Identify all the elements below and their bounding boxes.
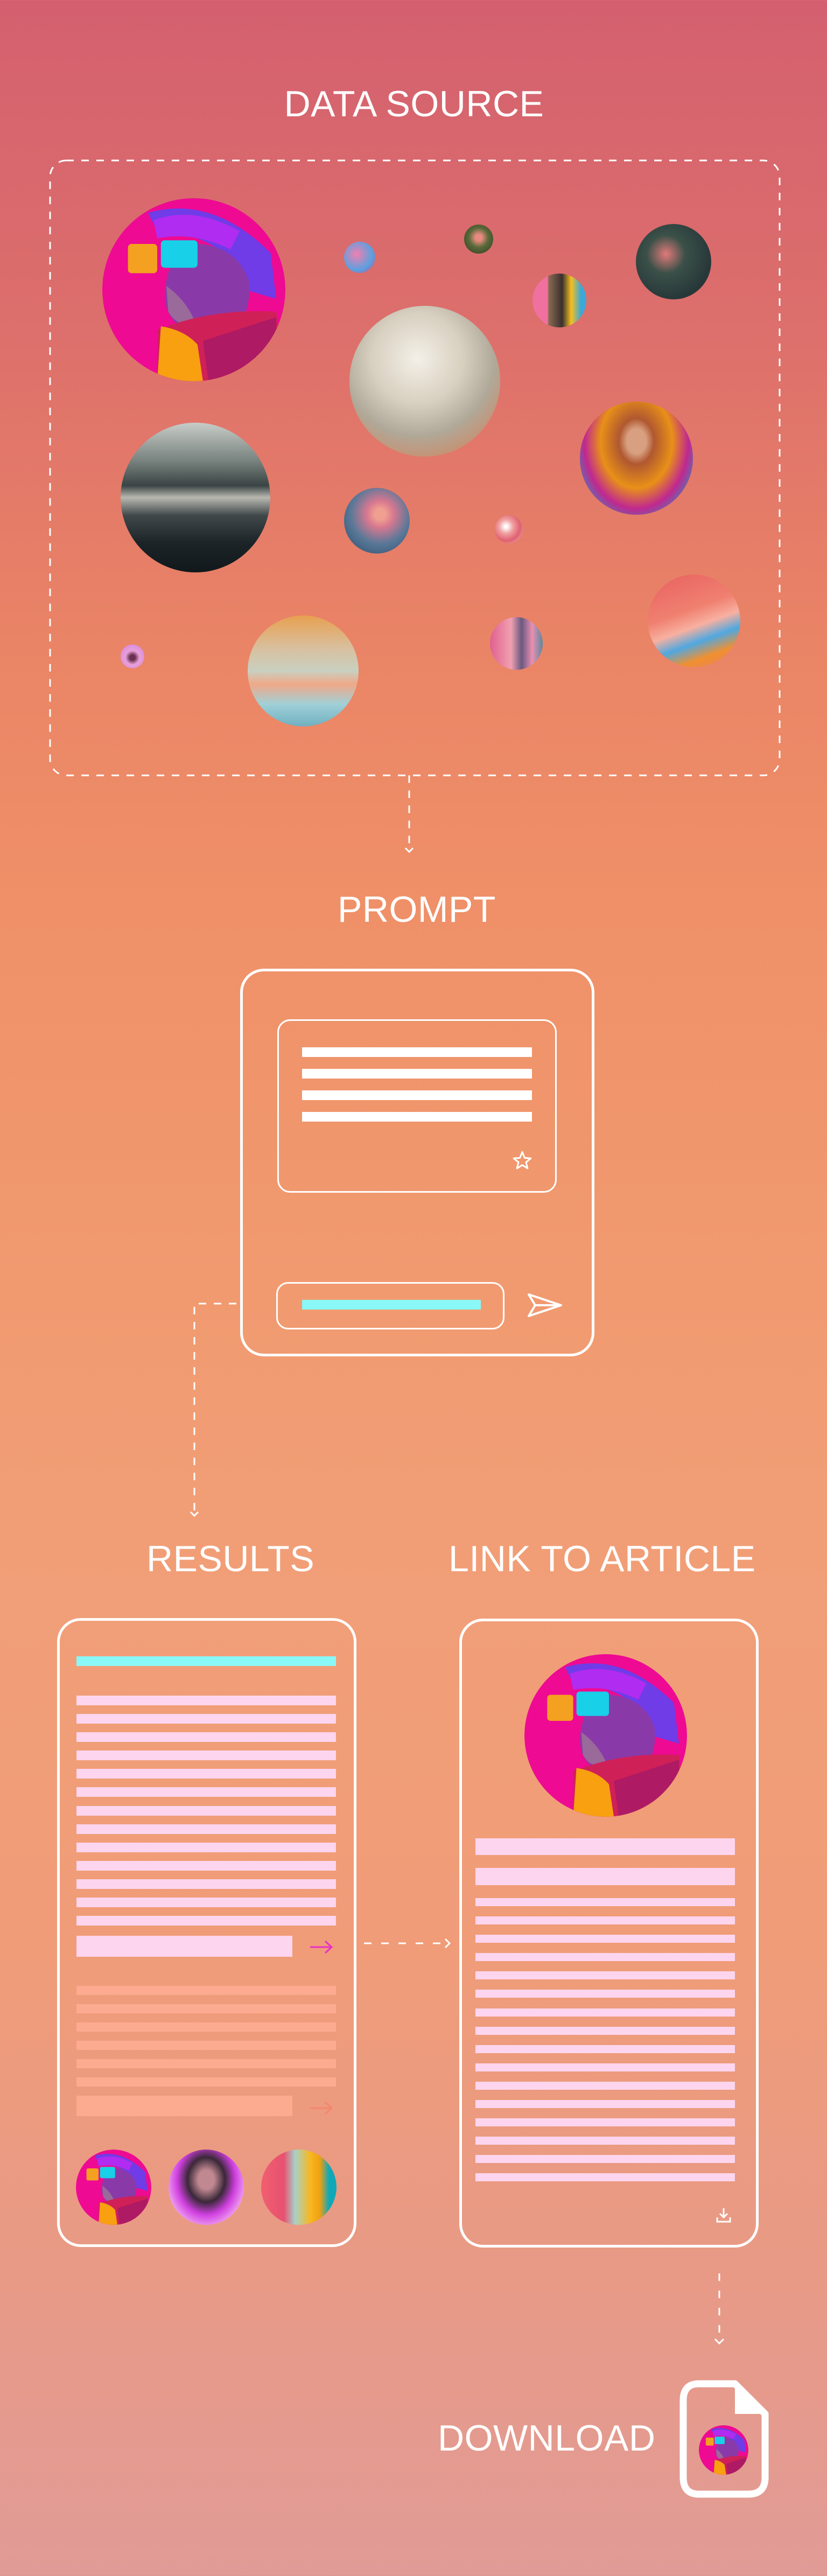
image: green garden: [464, 225, 493, 254]
cyan header bar: [76, 1656, 336, 1666]
icon: magenta arrow: [310, 1941, 333, 1954]
image: sneaker: [648, 575, 740, 667]
result thumbnails: [76, 2150, 337, 2225]
article hero image: [524, 1654, 687, 1817]
image: yacht: [121, 423, 270, 572]
result text lines: [76, 1696, 336, 1957]
heading: download: DOWNLOAD: [438, 2418, 655, 2459]
article text lines: [475, 1838, 735, 2181]
file thumbnail: [699, 2425, 748, 2475]
image: man in suit: [532, 274, 586, 327]
icon: star: [513, 1151, 532, 1170]
text input area: [277, 1019, 557, 1193]
thumbnail: portrait: [76, 2150, 151, 2225]
image: flower: [344, 488, 410, 554]
image: tropical floral: [636, 224, 711, 299]
heading: link to article: LINK TO ARTICLE: [448, 1538, 756, 1579]
icon: download: [716, 2208, 731, 2223]
icon: faded arrow: [310, 2102, 333, 2115]
arrow: data source to prompt: [405, 775, 414, 853]
panel: prompt card: [240, 969, 594, 1356]
panel: link to article: [459, 1619, 759, 2248]
panel: results: [57, 1618, 356, 2247]
image: sphere: [495, 515, 523, 543]
image: fashion portrait: [102, 198, 285, 381]
image: cup: [121, 645, 144, 668]
thumbnail: colorful portrait: [261, 2150, 337, 2225]
input field: [276, 1282, 504, 1329]
arrow: prompt to results: [190, 1303, 236, 1517]
image: woman in orange: [580, 402, 693, 515]
image: colorful living room: [248, 615, 359, 726]
image: lipstick: [344, 242, 375, 273]
heading: prompt: PROMPT: [338, 889, 496, 930]
thumbnail: neon portrait: [169, 2150, 244, 2225]
arrow: results to article: [364, 1938, 451, 1948]
image: pink building: [490, 617, 543, 670]
icon: downloaded file: [679, 2380, 769, 2497]
arrow: article to download: [714, 2273, 724, 2344]
faded result lines: [76, 1986, 336, 2116]
image: futuristic architecture: [349, 306, 500, 457]
icon: send: [528, 1293, 562, 1317]
heading: results: RESULTS: [146, 1538, 314, 1579]
panel: data source dashed frame: [50, 159, 781, 776]
prompt text lines: [302, 1047, 532, 1122]
title: data source: DATA SOURCE: [284, 83, 544, 124]
